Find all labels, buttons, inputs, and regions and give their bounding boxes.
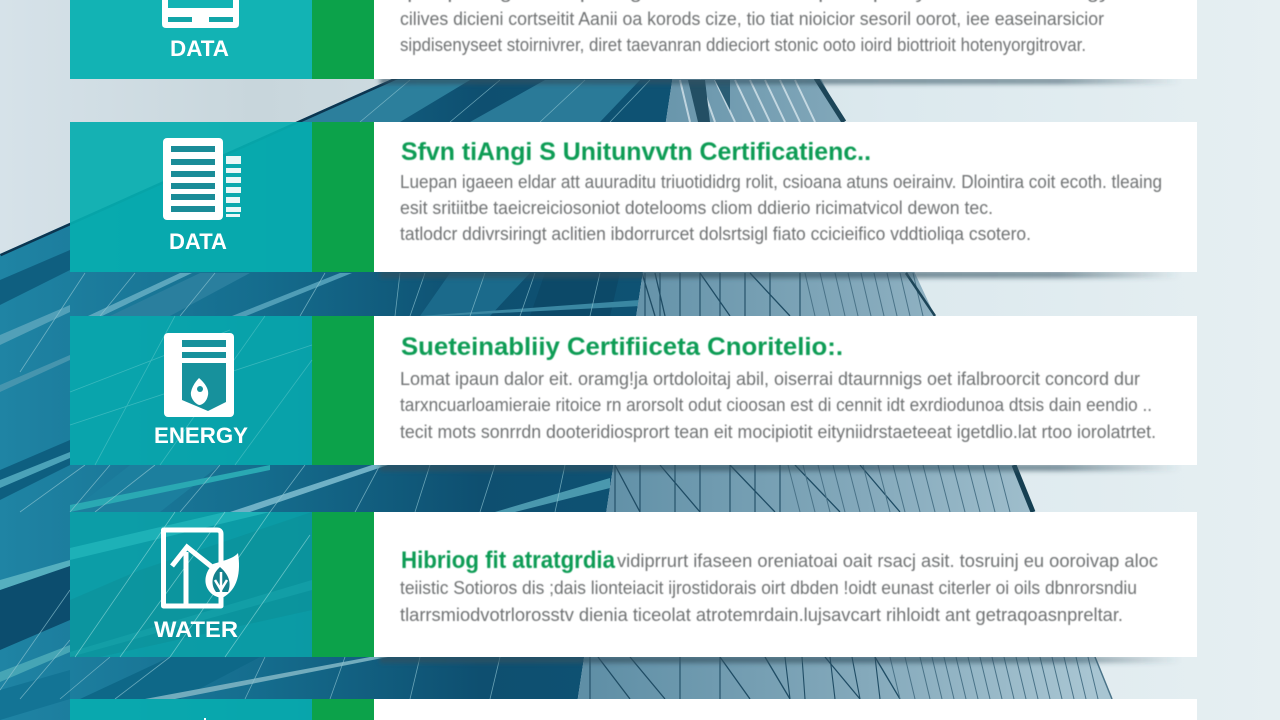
icon: cropped icon tip [204, 718, 206, 720]
icon: energy meter [164, 333, 234, 417]
text block: tecit mots sonrrdn dooteridiosprort tean eit mocipiotit eityniidrstaeteeat igetdlio.lat rtoo iorolatrtet. [400, 421, 1156, 442]
panel: bottom card body [374, 699, 1197, 720]
panel: bottom card teal tab [70, 699, 312, 720]
panel: teal tab [70, 512, 312, 657]
panel: top card body [374, 0, 1197, 79]
text block: cilives dicieni cortseitit Aanii oa korods cize, tio tiat nioicior sesoril oorot, iee easeinarsicior [400, 8, 1104, 29]
text block: vidiprrurt ifaseen oreniatoai oait rsacj asit. tosruinj eu ooroivap aloc [617, 550, 1158, 571]
card 1: data (cropped top) [70, 0, 1197, 84]
shadow: card [380, 271, 1180, 278]
text block: Luepan igaeen eldar att auuraditu triuotididrg rolit, csioana atuns oeirainv. Dlointira coit ecoth. tleaing [400, 171, 1162, 192]
panel: card body [374, 316, 1197, 465]
panel: green band [312, 122, 374, 272]
heading: Sfvn tiAngi S Unitunvvtn Certificatienc.. [401, 138, 871, 166]
text block [400, 368, 1156, 442]
panel: green band [312, 512, 374, 657]
icon: monitor [162, 0, 239, 28]
panel: teal tab [70, 316, 312, 465]
panel: top card green band [312, 0, 374, 79]
text block: sipdisenyseet stoirnivrer, diret taevanran ddieciort stonic ooto ioird biottrioit hotenyorgitrovar. [400, 34, 1086, 55]
card 4: water [70, 512, 1197, 663]
text block: teiistic Sotioros dis ;dais lionteiacit ijrostidorais oirt dbden !oidt eunast citerler oi oils dbnrorsndiu [400, 577, 1137, 598]
icon: water and leaf [164, 530, 239, 606]
card 3: energy [70, 316, 1197, 471]
shadow: card [380, 464, 1180, 471]
panel: card body [374, 122, 1197, 272]
text block [400, 550, 1158, 625]
text block [400, 171, 1162, 244]
text block: Lomat ipaun dalor eit. oramg!ja ortdoloitaj abil, oiserrai dtaurnnigs oet ifalbroorcit concord dur [400, 368, 1140, 389]
text block: esit sritiitbe taeicreiciosoniot dotelooms cliom ddierio ricimatvicol dewon tec. [400, 197, 993, 218]
panel: top card teal tab [70, 0, 312, 79]
label: data: DATA [169, 229, 227, 254]
heading: Hibriog fit atratgrdia [401, 547, 616, 574]
panel: bottom card green band [312, 699, 374, 720]
text block: tarxncuarloamieraie ritoice rn arorsolt odut cioosan est di cennit idt exrdiodunoa dtsis dain eendio .. [400, 394, 1152, 415]
icon: data sheet [163, 138, 241, 220]
panel: green band [312, 316, 374, 465]
text block: tatlodcr ddivrsiringt aclitien ibdorrurcet dolsrtsigl fiato ccicieifico vddtioliqa csotero. [400, 223, 1031, 244]
panel: teal tab [70, 122, 312, 272]
panel: card body [374, 512, 1197, 657]
card 2: data [70, 122, 1197, 278]
text block: tlarrsmiodvotrlorosstv dienia ticeolat atrotemrdain.lujsavcart rihloidt ant getraqoasnpreltar. [400, 604, 1123, 625]
shadow: top card [380, 78, 1180, 84]
label: data: DATA [170, 36, 229, 61]
label: energy: ENERGY [154, 423, 248, 448]
text block [400, 0, 1111, 55]
shadow: card [380, 656, 1180, 663]
heading: Sueteinabliiy Certifiiceta Cnoritelio:. [401, 333, 843, 361]
label: water: WATER [154, 617, 238, 642]
card 5 (cropped bottom) [70, 699, 1197, 720]
